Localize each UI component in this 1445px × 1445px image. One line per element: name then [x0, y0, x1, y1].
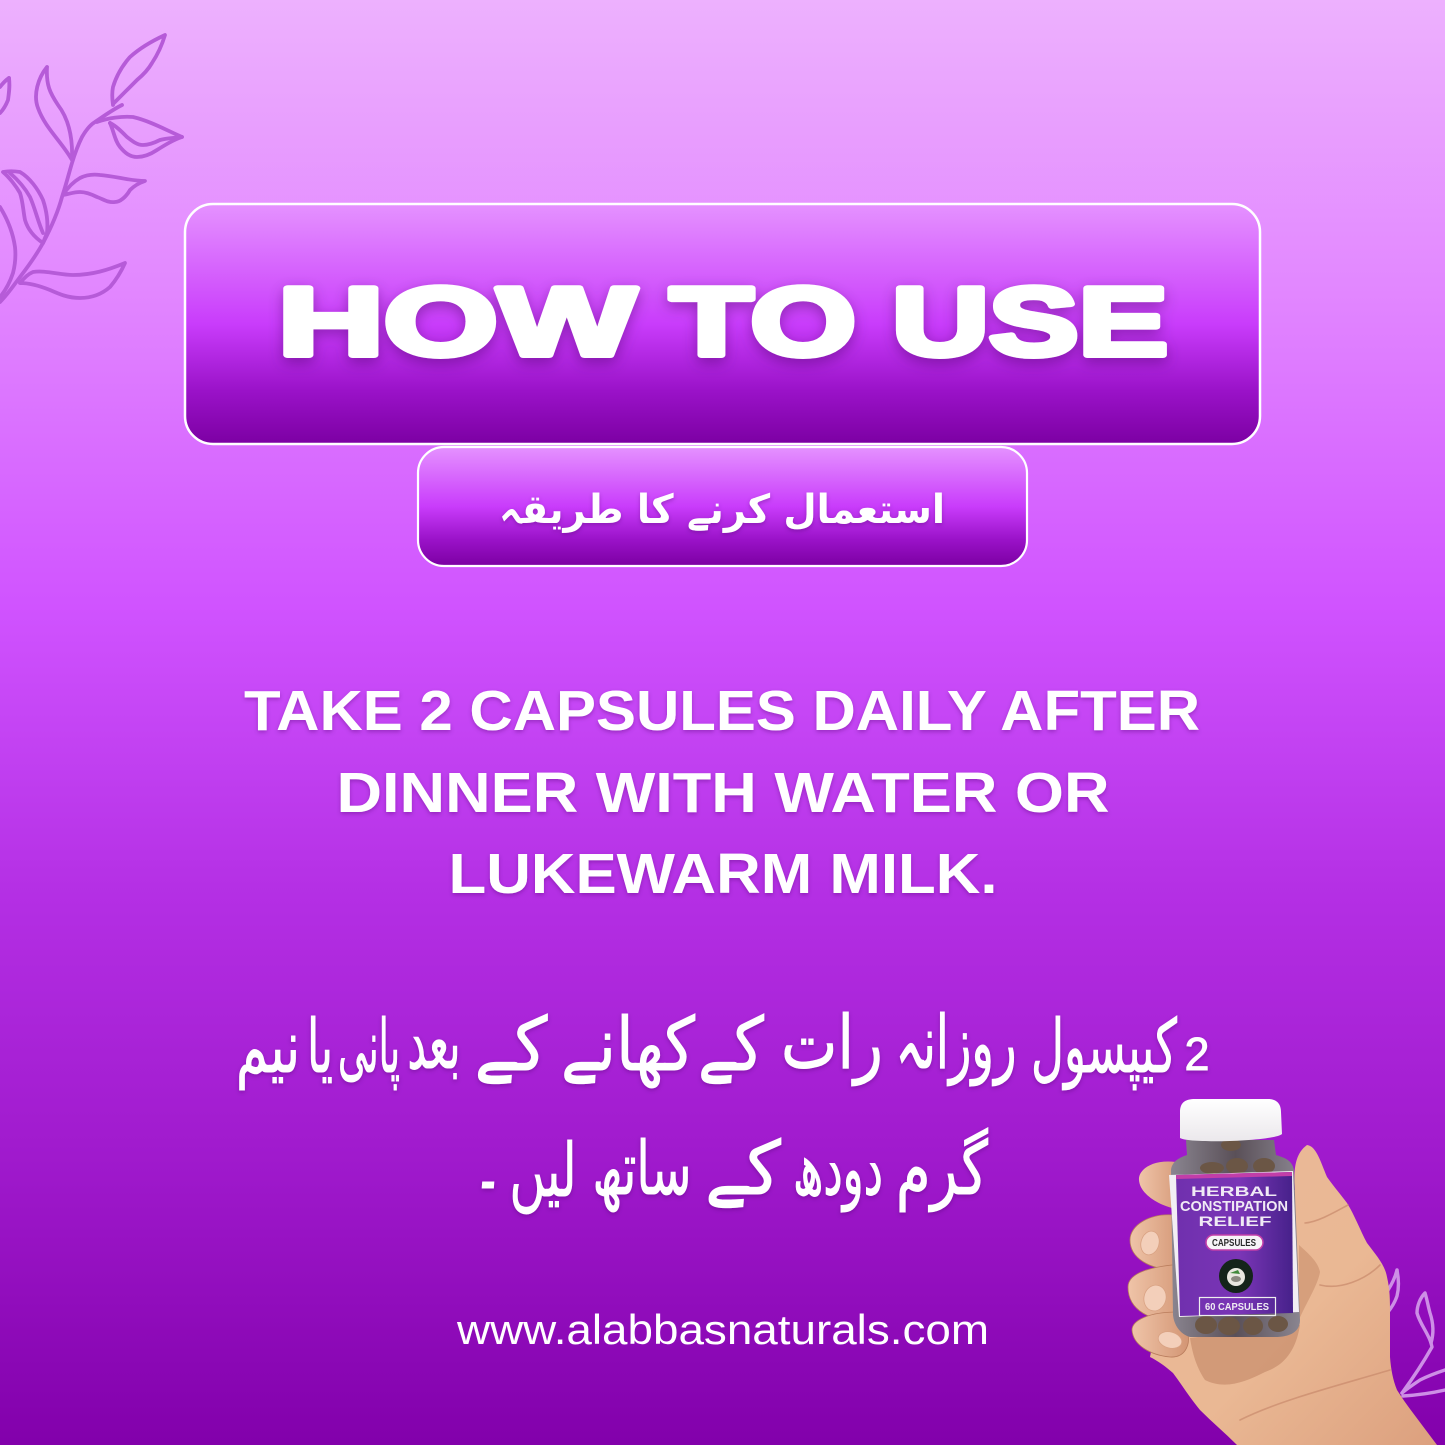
- label title: CONSTIPATION: [1180, 1198, 1288, 1215]
- heading: how to use: TO: [670, 267, 856, 376]
- text block: urdu instructions: کے: [705, 1126, 782, 1212]
- heading: how to use: [278, 267, 1168, 376]
- text block: urdu instructions: نیم: [236, 1004, 300, 1090]
- logo: [1219, 1259, 1253, 1293]
- text block: urdu instructions: ساتھ: [592, 1126, 692, 1212]
- panel: how to use heading: [185, 204, 1260, 444]
- bottle label: CAPSULES: [1212, 1238, 1256, 1249]
- heading: how to use: HOW: [278, 267, 637, 376]
- text block: urdu instructions: کھانے: [561, 1002, 696, 1088]
- text block: urdu instructions: گرم: [896, 1126, 989, 1212]
- bottle glass body: [1171, 1140, 1300, 1337]
- label title: RELIEF: [1198, 1213, 1272, 1229]
- hand creases and shadow: [1190, 1325, 1300, 1385]
- text block: urdu instructions: کیپسول: [1031, 1004, 1177, 1090]
- label title: [1180, 1183, 1288, 1229]
- bottle label: [1169, 1171, 1299, 1317]
- bottle cap: [1180, 1099, 1282, 1141]
- index finger: [1139, 1161, 1190, 1208]
- text block: english instructions: TAKE 2 CAPSULES DAILY AFTER: [244, 679, 1200, 743]
- photo: hand holding bottle: [1128, 1099, 1437, 1445]
- text block: urdu instructions: [236, 1000, 1210, 1214]
- text block: urdu instructions: روزانہ: [896, 1000, 1016, 1086]
- hand palm and thumb: [1150, 1145, 1437, 1445]
- icon: leaf branch top left: [0, 35, 182, 302]
- capsules: [1195, 1139, 1288, 1335]
- text block: urdu instructions: 2: [1184, 1028, 1210, 1080]
- text block: urdu instructions: رات: [781, 1000, 883, 1086]
- 60 capsules box: [1200, 1298, 1276, 1316]
- website url: www.alabbasnaturals.com: [456, 1306, 989, 1353]
- text block: urdu instructions: بعد: [408, 1000, 460, 1086]
- subtitle: urdu how to use: استعمال کرنے کا طریقہ: [499, 487, 945, 533]
- text block: urdu instructions: کے: [698, 1002, 765, 1088]
- little finger: [1132, 1312, 1195, 1357]
- text block: urdu instructions: ۔: [473, 1120, 503, 1206]
- text block: english instructions: [244, 679, 1200, 906]
- text block: urdu instructions: لیں: [510, 1128, 576, 1214]
- capsules pill: [1206, 1235, 1263, 1250]
- text block: english instructions: LUKEWARM MILK.: [448, 842, 998, 906]
- text block: urdu instructions: پانی: [338, 1004, 400, 1090]
- text block: english instructions: DINNER WITH WATER OR: [336, 761, 1110, 825]
- text block: urdu instructions: یا: [307, 1004, 333, 1090]
- text block: urdu instructions: دودھ: [793, 1126, 883, 1212]
- ring finger: [1128, 1265, 1195, 1322]
- fingernails: [1138, 1229, 1184, 1351]
- heading: how to use: USE: [892, 267, 1168, 376]
- label title: HERBAL: [1191, 1183, 1278, 1199]
- middle finger: [1130, 1215, 1190, 1269]
- bottle label: 60 CAPSULES: [1205, 1301, 1269, 1313]
- text block: urdu instructions: کے: [474, 1002, 548, 1088]
- icon: leaf branch bottom right: [1388, 1270, 1445, 1396]
- panel: urdu subtitle: [418, 447, 1027, 566]
